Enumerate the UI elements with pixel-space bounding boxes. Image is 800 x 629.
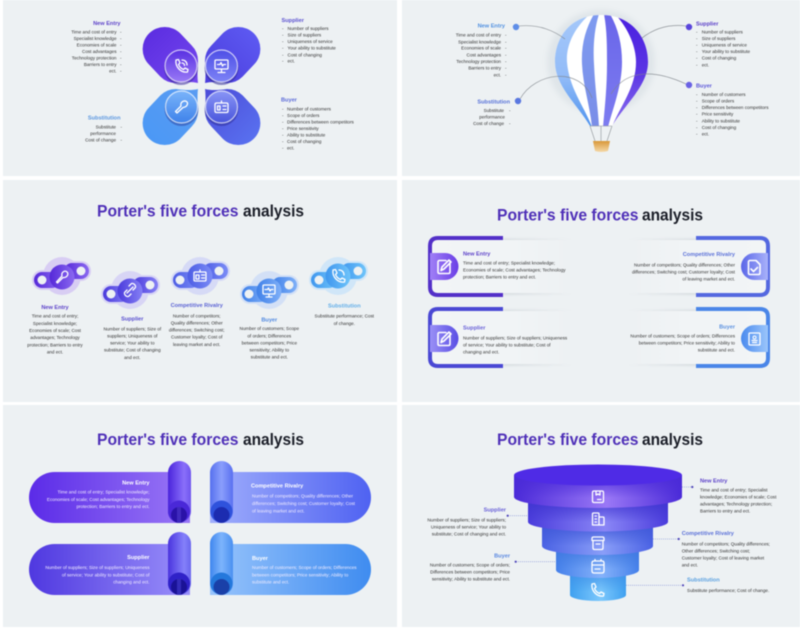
text: New Entry: Time and cost of entry; [32,314,78,319]
text: Buyer list: - [282,132,284,138]
text: Supplier list: Cost of changing [288,52,322,57]
text: Buyer list: Cost of changing [287,139,322,144]
text: Substitution: Substitute performance; Cost [315,314,375,319]
text: New Entry list: Technology protection [456,59,501,64]
text: New Entry list: ect. [494,72,501,77]
text: Substitution list: Cost of change [85,138,116,142]
text: Supplier: Number of suppliers; Size of [103,326,162,331]
text: New Entry [27,305,83,354]
card: Buyer: Buyer [719,324,736,330]
text: New Entry list [456,24,507,77]
petal: top right [205,27,260,83]
text: New Entry list: ect. [109,68,116,74]
card: Competitive Rivalry [627,238,768,295]
card: Buyer [627,309,768,366]
connector: Supplier [507,515,528,517]
text: Competitive Rivalry: Quality differences; Other [171,321,223,326]
card: Supplier [430,309,573,366]
card: Buyer: between competitors; Price sensitivity; Ability to [639,341,735,346]
card: New Entry: Economies of scale; Cost advantages; Technology [463,268,566,273]
text: Buyer: Number of customers; Scope of orders; [430,562,510,567]
text: Buyer list: - [696,112,698,117]
title: analysis [243,202,304,220]
title: Porter's five forces [497,206,638,224]
text: New Entry list: - [120,56,122,60]
card: Buyer: substitute and ect. [698,348,735,353]
text: Supplier [427,507,507,537]
icon: phone blob [309,257,368,295]
text: Buyer list [281,98,355,150]
icon: link blob [101,271,160,309]
text: Buyer list: - [282,139,284,144]
text: Supplier list: Size of suppliers [702,36,736,41]
text: New Entry list: Barriers to entry [468,66,502,71]
text: Buyer list: - [696,125,698,130]
text: Supplier: and ect. [124,355,140,360]
text: New Entry list: - [120,42,122,48]
band: New Entry: Time and cost of entry; Specialist knowledge; [57,490,150,495]
text: Substitution list: performance [90,131,116,136]
text: Supplier list: ect. [702,62,709,67]
node: New Entry [513,24,519,30]
text: Supplier list: Your ability to substitute [702,49,750,54]
card: Supplier: Supplier [463,325,486,331]
petal: bottom right [205,89,260,145]
text: Competitive Rivalry: Competitive Rivalry [171,303,224,309]
text: Substitution list: - [120,124,122,130]
icon: monitor medallion [204,50,238,85]
text: New Entry: knowledge; Economies of scale; Cost [700,495,777,500]
text: Buyer: Number of customers; Scope [240,326,299,331]
text: New Entry list: New Entry [478,24,506,30]
text: New Entry list: Specialist knowledge [458,39,501,44]
text: New Entry list: Barriers to entry [84,62,117,67]
text: New Entry: New Entry [41,305,70,311]
text: New Entry list: - [120,49,122,54]
text: New Entry list: Time and cost of entry [456,32,502,38]
text: Competitive Rivalry: Customer loyalty; Cost of leaving market [682,556,765,561]
card: Supplier: Number of suppliers; Size of suppliers; Uniqueness [463,335,568,340]
text: Buyer: Differences between competitors; Price [430,570,510,575]
icon: badge blob [171,257,230,295]
text: Supplier list: ect. [288,59,295,64]
text: Competitive Rivalry: Other differences; Switching cost; [682,549,750,554]
text: New Entry list: - [505,39,507,44]
icon: monitor blob [240,271,299,309]
hot air balloon [545,10,660,152]
band: New Entry: Economies of scale; Cost advantages; Technology [47,497,150,502]
text: Substitution list: Substitution [88,116,121,122]
text: Supplier: substitute; Cost of changing [104,348,161,353]
text: New Entry: New Entry [700,478,728,484]
text: Buyer list: ect. [702,132,709,137]
text: Supplier list: - [282,26,284,31]
text: New Entry list: Specialist knowledge [74,36,117,41]
text: Buyer [430,553,511,582]
connector: Buyer [515,561,556,563]
text: Buyer list: - [282,106,284,112]
title: analysis [642,206,703,224]
text: New Entry list: Economies of scale [77,42,117,48]
text: Supplier list: Uniqueness of service [702,42,747,48]
text: Substitution list [473,100,511,126]
band: Competitive Rivalry: Number of competitors; Quality differences; Other [252,494,353,499]
title: Porter's five forces [97,202,238,220]
card: Supplier: changing and ect. [463,350,499,355]
text: Competitive Rivalry: Number of competitors; [173,314,221,319]
text: Supplier list: Number of suppliers [288,26,329,31]
text: Supplier: Supplier [121,317,144,323]
panel: petal diagram [3,0,397,176]
text: New Entry list: - [120,68,122,74]
card: Competitive Rivalry: differences; Switching cost; Customer loyalty; Cost [632,270,736,275]
text: Supplier list: - [696,36,698,41]
text: New Entry: Specialist knowledge; [33,321,77,326]
text: Buyer list: - [282,146,284,150]
text: Buyer list: Price sensitivity [702,112,734,117]
card: New Entry [430,238,573,295]
icon: key medallion [164,91,198,126]
card: Supplier: of service; Your ability to substitute; Cost of [463,343,551,348]
node: Buyer [686,82,692,88]
text: Supplier list: Uniqueness of service [288,39,333,44]
text: Substitution list: Substitution [477,100,511,106]
connector: New Entry [519,26,565,39]
band: Buyer: substitute and ect. [252,579,289,584]
text: New Entry: protection; Barriers to entry [27,342,83,347]
text: Supplier list: - [696,56,698,61]
text: Buyer [240,317,299,360]
text: Substitution list: performance [479,115,505,120]
band: New Entry: protection; Barriers to entry and ect. [76,504,150,509]
icon: phone medallion [164,50,198,85]
text: Buyer list: Number of customers [287,106,332,112]
text: Supplier list: Size of suppliers [288,33,322,38]
text: New Entry list: - [120,62,122,67]
text: Competitive Rivalry: leaving market and ect. [173,342,220,347]
text: New Entry list: - [505,59,507,64]
text: Supplier list: - [282,52,284,57]
band: Buyer [210,532,371,595]
text: New Entry list: - [505,72,507,77]
text: Supplier list: - [696,62,698,67]
text: Supplier: substitute; Cost of changing and ect. [432,532,506,537]
text: Buyer list: Number of customers [702,92,746,97]
text: Buyer list: - [282,119,284,124]
text: Supplier list: Your ability to substitute [288,46,336,51]
petal: bottom left [143,89,198,145]
band: Supplier: of service; Your ability to substitute; Cost of [62,572,150,577]
band: Supplier [29,532,191,595]
text: Buyer list: Scope of orders [287,113,320,118]
text: New Entry list [71,21,122,74]
band: Competitive Rivalry: of leaving market and ect. [252,508,305,513]
card: Competitive Rivalry: of leaving market and ect. [682,277,735,282]
band: Competitive Rivalry: Competitive Rivalry [251,483,304,489]
text: Supplier: suppliers; Uniqueness of [107,334,158,339]
panel: scroll bands [3,405,397,627]
text: Buyer: sensitivity; Ability to substitute and ect. [432,577,510,582]
connector: Supplier [642,26,686,38]
card: Competitive Rivalry: Competitive Rivalry [683,252,736,258]
text: Buyer: substitute and ect. [251,355,288,360]
text: Buyer list: - [696,118,698,123]
text: New Entry list: - [120,30,122,34]
connector: Substitution [626,584,684,586]
text: New Entry list: New Entry [93,21,121,27]
text: Substitution list: - [120,138,122,142]
text: New Entry list: Technology protection [72,56,117,60]
text: New Entry: advantages; Technology protection; [700,502,772,507]
icon: key blob [32,257,91,295]
text: Substitution list: - [509,121,511,126]
text: New Entry: advantages; Technology [30,335,80,340]
text: Buyer list: - [696,105,698,110]
text: New Entry [700,478,777,514]
text: Substitution [315,304,375,326]
node: Substitution [515,98,521,104]
text: Buyer list: - [282,126,284,131]
band: New Entry: New Entry [122,481,150,487]
band: New Entry [29,461,191,523]
text: Buyer: between competitors; Price [242,340,297,345]
text: Buyer list: Buyer [281,98,298,104]
text: Supplier list: - [282,39,284,44]
funnel chart [514,464,682,601]
card: New Entry: protection; Barriers to entry and ect. [463,275,536,280]
text: Substitution list [85,116,122,142]
node: Supplier [686,24,692,30]
text: Buyer: of orders; Differences [247,333,292,338]
text: Supplier list: - [282,33,284,38]
text: Supplier list: - [696,30,698,34]
text: New Entry: Time and cost of entry; Specialist [700,487,768,492]
text: Supplier list: Supplier [696,22,719,28]
text: Substitution [687,578,769,593]
band: Buyer: between competitors; Price sensitivity; Ability to [252,572,349,577]
title: analysis [243,430,304,449]
text: Substitution: of change. [334,321,355,326]
card: New Entry: New Entry [463,251,491,257]
text: Buyer list: Cost of changing [702,125,737,130]
text: Substitution list: Substitute [484,108,504,113]
text: Supplier list: Cost of changing [702,56,737,61]
text: Buyer: sensitivity; Ability to [250,347,290,352]
text: New Entry: and ect. [47,349,63,354]
text: Competitive Rivalry: and ect. [682,563,698,568]
text: Buyer list: Differences between competitors [287,119,355,124]
icon: badge medallion [204,91,238,126]
text: Buyer list: - [282,113,284,118]
connector: New Entry [682,486,693,488]
text: New Entry list: - [505,66,507,71]
title: analysis [642,430,703,449]
text: Substitution list: - [509,108,511,113]
text: Supplier: Supplier [484,507,507,513]
text: Competitive Rivalry: Customer loyalty; Cost of [171,335,223,340]
panel: balloon diagram [402,0,800,176]
band: Competitive Rivalry [210,461,371,523]
text: Buyer list: - [696,99,698,104]
text: Buyer list: Ability to substitute [702,118,740,123]
text: Competitive Rivalry: Competitive Rivalry [682,531,735,537]
text: Competitive Rivalry: differences; Switching cost; [169,328,224,333]
band: Supplier: changing and ect. [113,579,150,584]
text: Buyer list: - [696,132,698,137]
card: Competitive Rivalry: Number of competitors; Quality differences; Other [634,262,735,267]
connector: Competitive Rivalry [653,538,680,540]
text: Supplier list: Supplier [282,18,305,24]
text: Supplier list [696,22,750,67]
card: New Entry: Time and cost of entry; Specialist knowledge; [463,260,555,265]
band: Buyer: Buyer [252,556,269,562]
text: Supplier: Uniqueness of service; Your ability to [431,525,506,530]
band: Supplier: Number of suppliers; Size of suppliers; Uniqueness [45,565,150,570]
band: Supplier: Supplier [127,555,150,561]
text: Buyer list: - [696,92,698,97]
text: Competitive Rivalry [682,531,770,568]
text: New Entry list: Economies of scale [461,46,501,51]
title: Porter's five forces [497,430,638,449]
card: Buyer: Number of customers; Scope of orders; Differences [630,333,736,338]
text: Substitution list: Cost of change [473,121,504,126]
text: Buyer list: Price sensitivity [287,126,319,131]
text: Supplier [103,317,162,360]
text: Buyer list: ect. [287,146,294,150]
text: Supplier list [282,18,336,64]
text: Supplier list: - [282,46,284,51]
text: Supplier list: Number of suppliers [702,30,744,34]
text: New Entry list: - [505,52,507,57]
band: Buyer: Number of customers; Scope of orders; Differences [252,565,357,570]
text: Substitution: Substitution [687,578,720,584]
text: Buyer: Buyer [494,553,511,559]
text: Buyer list: Buyer [696,83,713,89]
text: New Entry list: - [120,36,122,41]
petal: top left [143,27,198,83]
text: New Entry list: Cost advantages [82,49,117,54]
text: Buyer list: Ability to substitute [287,132,326,138]
text: Substitution list: Substitute [96,124,116,130]
text: New Entry list: - [505,46,507,51]
text: Supplier list: - [696,42,698,48]
text: Supplier list: - [696,49,698,54]
text: Substitution: Substitution [328,304,361,310]
title: Porter's five forces [97,430,238,449]
panel: five blobs [3,180,397,402]
text: Competitive Rivalry [169,303,224,347]
panel: four cards [402,180,800,402]
text: Substitution: Substitute performance; Cost of change. [687,588,769,593]
panel: funnel [402,405,800,627]
band: Competitive Rivalry: differences; Switching cost; Customer loyalty; Cost [252,501,356,506]
connector: Substitution [520,76,592,99]
text: New Entry list: Cost advantages [467,52,502,57]
text: New Entry list: Time and cost of entry [71,30,117,34]
connector: Buyer [611,74,686,94]
text: Buyer list: Differences between competitors [702,105,769,110]
text: Buyer list [696,83,769,137]
text: Supplier: Number of suppliers; Size of suppliers; [427,517,506,522]
text: New Entry: Barriers to entry and ect. [700,509,750,514]
text: Buyer: Buyer [261,317,278,323]
text: Buyer list: Scope of orders [702,99,735,104]
text: New Entry: Economies of scale; Cost [29,328,82,333]
text: Supplier: service; Your ability to [110,341,155,346]
text: New Entry list: - [505,32,507,38]
text: Competitive Rivalry: Number of competitors; Quality differences; [682,541,770,546]
text: Supplier list: - [282,59,284,64]
